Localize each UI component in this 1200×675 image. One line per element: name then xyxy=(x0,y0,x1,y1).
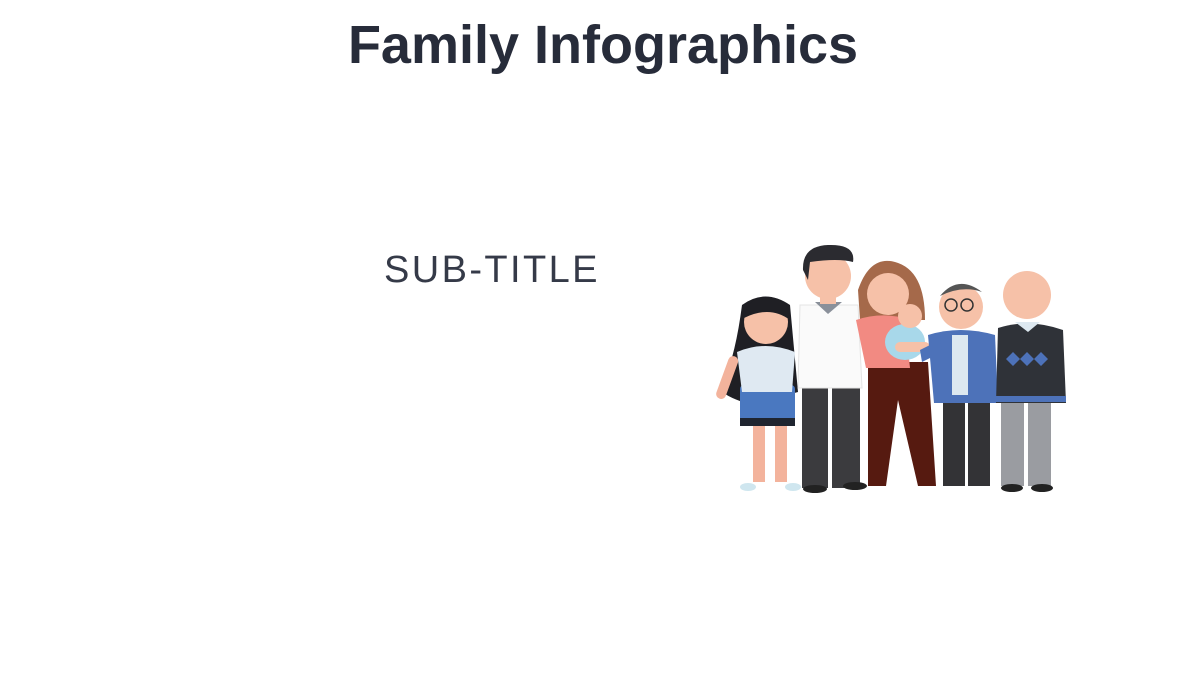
figure: father xyxy=(798,245,867,493)
subtitle: SUB-TITLE xyxy=(384,249,600,291)
figure: bald grandpa xyxy=(996,271,1066,492)
figure: grandpa with glasses xyxy=(920,284,998,486)
figure: girl xyxy=(715,296,801,491)
figure: mother with baby xyxy=(856,261,936,486)
title: Family Infographics xyxy=(348,15,858,75)
